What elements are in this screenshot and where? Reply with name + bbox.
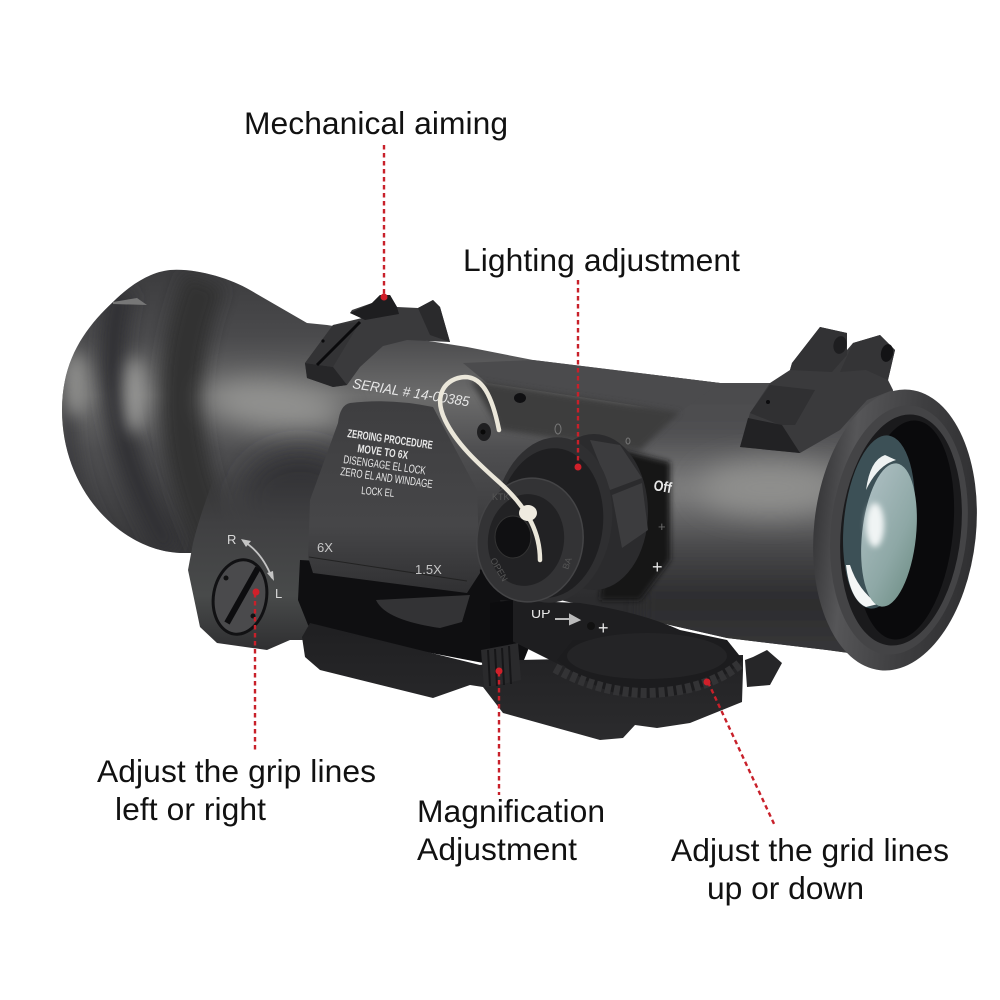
shadow under housing (298, 560, 540, 670)
base rail (302, 623, 743, 740)
cap lettering: KTK (492, 492, 510, 502)
eyepiece lens assembly (800, 381, 990, 679)
ridged cap (469, 471, 591, 609)
zeroing procedure text: LOCK EL (361, 485, 395, 500)
lens glass (835, 432, 923, 612)
rear sight (740, 327, 895, 453)
up arrow plus marking (528, 600, 609, 638)
scope body (62, 270, 910, 670)
dial marks (555, 424, 674, 577)
cap lettering: OPEN (488, 556, 510, 583)
dial marks: + (658, 519, 666, 534)
magnification lever (481, 600, 521, 688)
right tube section (641, 373, 893, 653)
icon: R L direction arrow (227, 532, 282, 601)
up arrow plus marking: UP (531, 605, 550, 621)
callout: magnification adjustment: Adjustment (417, 831, 577, 867)
top plate (463, 360, 720, 412)
icon: R L direction arrow: L (275, 586, 282, 601)
turret dome (500, 600, 735, 665)
front sight (305, 295, 450, 387)
dial marks: Off (652, 477, 674, 497)
cord eyelet (477, 423, 491, 441)
infographic: annotated scope diagram (62, 111, 977, 906)
magnification marks: 6X (317, 540, 333, 555)
callout: adjust the grid lines: Adjust the grid lines (671, 832, 949, 868)
screw hole (514, 393, 526, 403)
bell shading bands (113, 290, 170, 550)
zeroing procedure text: MOVE TO 6X (357, 443, 409, 462)
zeroing procedure text: ZERO EL AND WINDAGE (340, 466, 434, 491)
callout: magnification adjustment: Magnification (417, 793, 605, 829)
callout: mechanical aiming (244, 105, 508, 300)
callout: magnification adjustment (417, 668, 605, 867)
sight housing box (308, 401, 480, 593)
zeroing procedure text: ZEROING PROCEDURE (347, 428, 434, 452)
knob drum (540, 434, 648, 590)
lighting adjustment knob (469, 424, 674, 609)
serial number: SERIAL # 14-00385 (352, 375, 471, 409)
zeroing procedure text: DISENGAGE EL LOCK (343, 454, 427, 478)
cap lettering: BA (560, 556, 574, 571)
knurled dial (557, 640, 743, 698)
mount and base rail (298, 560, 782, 740)
callout: adjust the grid lines (671, 678, 949, 906)
callout: adjust the grid lines: up or down (707, 870, 864, 906)
elevation dial and levers (481, 600, 743, 698)
callout: lighting adjustment: Lighting adjustment (463, 242, 740, 278)
zeroing procedure text (340, 428, 434, 500)
dial marks: + (652, 557, 663, 577)
callout: adjust the grip lines: left or right (115, 791, 266, 827)
callout: mechanical aiming: Mechanical aiming (244, 105, 508, 141)
inner opening (829, 408, 973, 652)
cap center (495, 516, 531, 558)
knob recess (600, 450, 670, 600)
knob outer ring (486, 431, 620, 609)
callout: adjust the grip lines: Adjust the grip lines (97, 753, 376, 789)
outer ring (800, 381, 990, 679)
lower dome (376, 595, 470, 628)
right lever (745, 650, 782, 687)
callout: adjust the grip lines (97, 588, 376, 827)
magnification marks (317, 540, 442, 577)
callout: lighting adjustment (463, 242, 740, 470)
left windage arm (188, 470, 325, 650)
magnification marks: 1.5X (415, 562, 442, 577)
icon: R L direction arrow: R (227, 532, 236, 547)
cap lettering (488, 492, 574, 583)
up arrow plus marking: + (598, 618, 609, 638)
retaining cord (440, 377, 540, 560)
icon: windage dial (206, 554, 274, 640)
main tube silhouette (62, 270, 900, 660)
